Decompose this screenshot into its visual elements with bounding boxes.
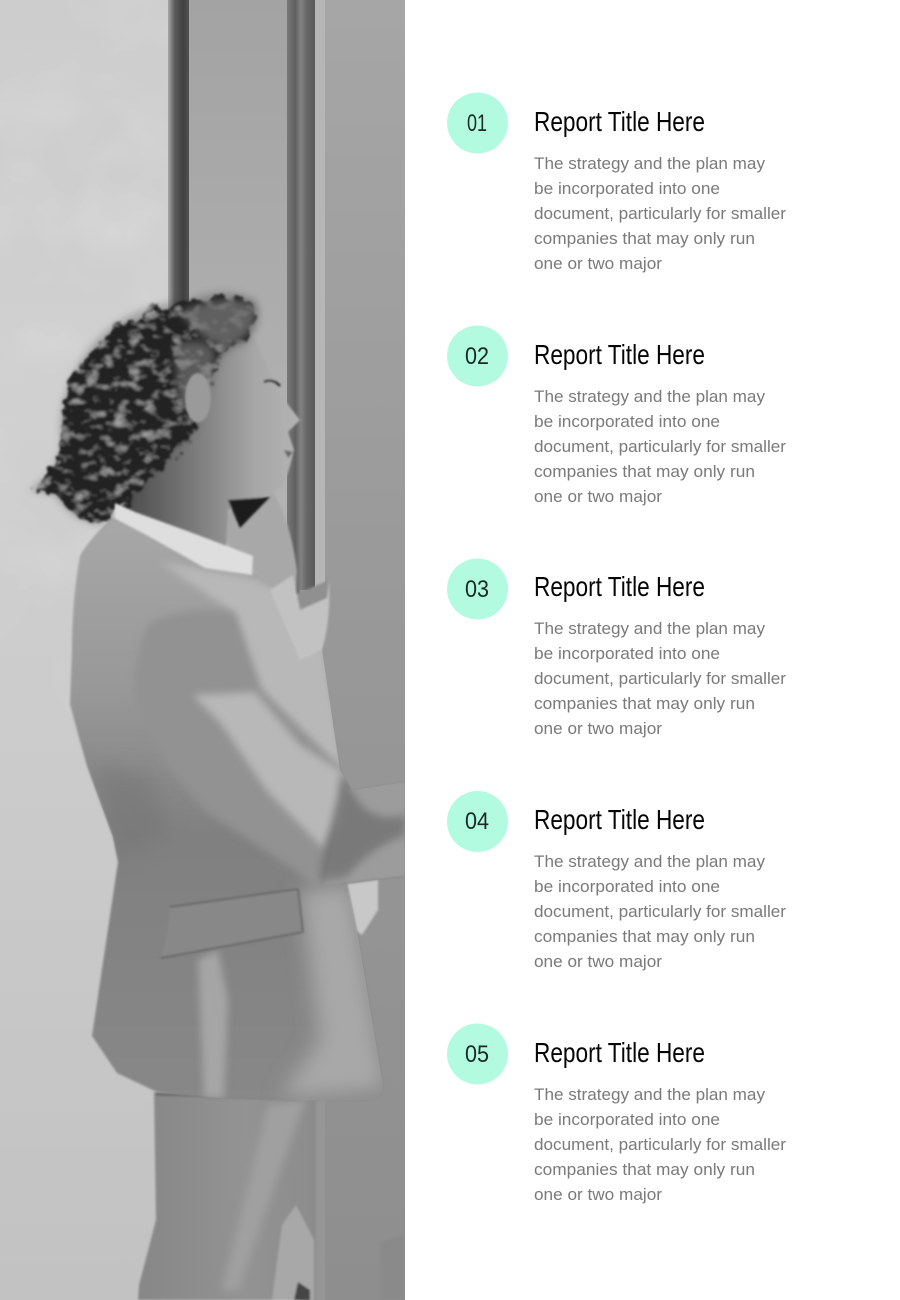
body text 02: be incorporated into one <box>534 412 720 431</box>
body text 05 <box>534 1085 786 1204</box>
sleeve base <box>141 609 340 881</box>
list item 01 <box>447 92 786 273</box>
person: trousers <box>138 1092 316 1300</box>
number badge 02: 02 <box>465 343 489 370</box>
person: white shirt collar <box>114 503 253 575</box>
body text 02 <box>534 387 786 506</box>
heading 01: Report Title Here <box>534 106 705 137</box>
chest light area <box>169 564 340 768</box>
photo background: wall and window frame <box>0 0 405 1300</box>
number badge 01 <box>447 92 508 154</box>
jacket shading <box>90 562 405 1098</box>
number badge 02 <box>447 326 508 386</box>
body text 04: The strategy and the plan may <box>534 852 765 871</box>
list item 03 <box>447 558 786 738</box>
person: ear <box>185 373 211 423</box>
body text 02: document, particularly for smaller <box>534 437 786 456</box>
body text 03 <box>534 619 786 738</box>
body text 01: be incorporated into one <box>534 179 720 198</box>
body text 05: The strategy and the plan may <box>534 1085 765 1104</box>
body text 05: be incorporated into one <box>534 1110 720 1129</box>
person: jacket and sleeve <box>70 515 405 1100</box>
number badge 05: 05 <box>465 1041 489 1068</box>
body text 03: be incorporated into one <box>534 644 720 663</box>
person: cuff and hand <box>227 494 330 658</box>
number badge 01: 01 <box>467 110 487 137</box>
person: curly hair <box>30 292 258 525</box>
body text 04: be incorporated into one <box>534 877 720 896</box>
body text 01: one or two major <box>534 254 662 273</box>
body text 01: The strategy and the plan may <box>534 154 765 173</box>
lower panel highlight <box>198 950 228 1098</box>
body text 03: The strategy and the plan may <box>534 619 765 638</box>
body text 01: companies that may only run <box>534 229 755 248</box>
body text 05: document, particularly for smaller <box>534 1135 786 1154</box>
number badge 04 <box>447 791 508 852</box>
number badge 05 <box>447 1024 508 1084</box>
heading 03: Report Title Here <box>534 571 705 602</box>
person: neck and face <box>121 340 300 546</box>
jacket pocket flap <box>161 888 303 958</box>
sleeve lit area <box>193 692 343 850</box>
heading 05: Report Title Here <box>534 1037 705 1068</box>
body text 04: companies that may only run <box>534 927 755 946</box>
list item 04 <box>447 791 786 971</box>
body text 04: one or two major <box>534 952 662 971</box>
heading 02: Report Title Here <box>534 339 705 370</box>
list item 05 <box>447 1024 786 1204</box>
body text 04: document, particularly for smaller <box>534 902 786 921</box>
list item 02 <box>447 326 786 506</box>
body text 02: The strategy and the plan may <box>534 387 765 406</box>
elbow creases <box>318 775 405 884</box>
body text 02: companies that may only run <box>534 462 755 481</box>
body text 05: one or two major <box>534 1185 662 1204</box>
body text 01 <box>534 154 786 273</box>
person: shirt hem under jacket <box>345 878 378 935</box>
body text 01: document, particularly for smaller <box>534 204 786 223</box>
forearm <box>344 782 405 882</box>
number badge 03 <box>447 558 508 620</box>
body text 05: companies that may only run <box>534 1160 755 1179</box>
body text 03: companies that may only run <box>534 694 755 713</box>
lower right light area <box>280 884 385 1098</box>
number badge 03: 03 <box>465 576 489 603</box>
body text 02: one or two major <box>534 487 662 506</box>
body text 04 <box>534 852 786 971</box>
body text 03: one or two major <box>534 719 662 738</box>
body text 03: document, particularly for smaller <box>534 669 786 688</box>
back shadow <box>90 772 150 854</box>
panel: black and white photo of a woman on the phone by a window <box>0 0 405 1300</box>
number badge 04: 04 <box>465 808 489 835</box>
heading 04: Report Title Here <box>534 804 705 835</box>
